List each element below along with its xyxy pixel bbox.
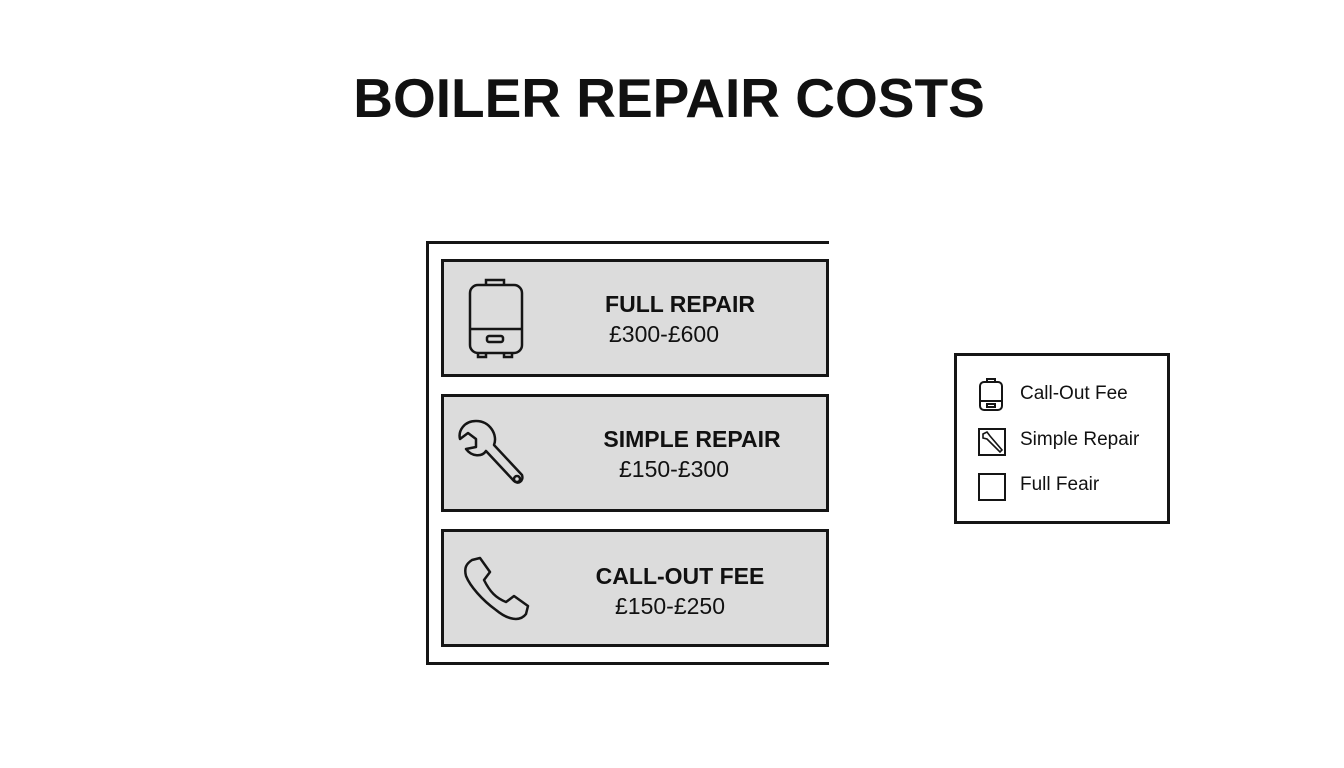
- panel: simple repair: [441, 394, 829, 512]
- title: BOILER REPAIR COSTS: [353, 67, 985, 129]
- icon: phone: [464, 556, 530, 620]
- panel: call-out fee: CALL-OUT FEE: [596, 563, 764, 589]
- panel: full repair: [441, 259, 829, 377]
- panel: cost frame: [426, 241, 829, 665]
- legend labels: Call-Out Fee: [1020, 383, 1128, 404]
- icon: legend boiler: [979, 378, 1003, 411]
- icon: legend wrench: [978, 428, 1006, 456]
- legend labels: Simple Repair: [1020, 429, 1139, 450]
- icon: legend empty square: [978, 473, 1006, 501]
- legend labels: [1020, 383, 1139, 495]
- panel: simple repair: SIMPLE REPAIR: [603, 426, 781, 452]
- panel: call-out fee: £150-£250: [615, 593, 725, 619]
- legend: [954, 353, 1170, 524]
- panel: call-out fee: [441, 529, 829, 647]
- legend labels: Full Feair: [1020, 474, 1099, 495]
- panel: simple repair: £150-£300: [619, 456, 729, 482]
- panel: full repair: FULL REPAIR: [605, 291, 755, 317]
- icon: wrench: [458, 420, 524, 484]
- icon: boiler: [468, 278, 524, 358]
- panel: full repair: £300-£600: [609, 321, 719, 347]
